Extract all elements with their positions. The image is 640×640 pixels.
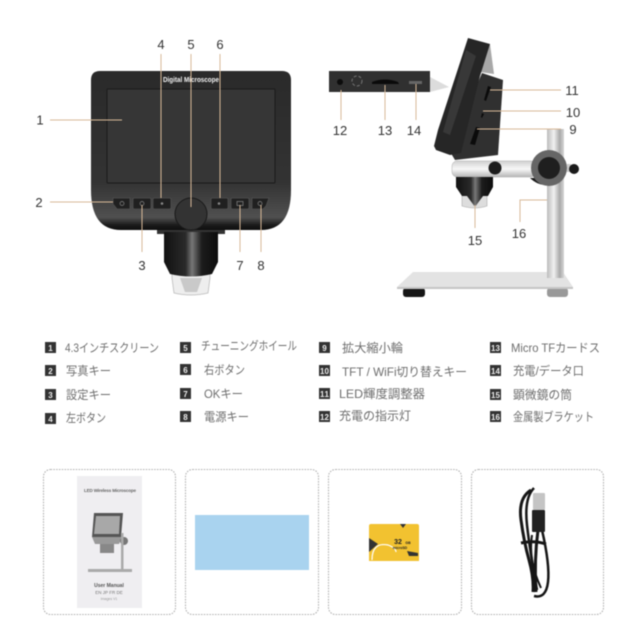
legend item 4 <box>45 410 106 425</box>
lens assembly <box>456 177 493 208</box>
yellow micro SD card <box>369 524 419 561</box>
legend item 11: 11 <box>320 390 330 399</box>
front view of microscope <box>91 71 291 295</box>
legend item 11: LED輝度調整器 <box>339 387 425 401</box>
legend item 3 <box>45 388 111 402</box>
legend item 16: 金属製ブラケット <box>513 409 594 424</box>
legend item 12: 充電の指示灯 <box>339 408 411 423</box>
side controls <box>470 86 491 145</box>
brand text: Digital Microscope <box>163 75 219 84</box>
side view callouts: 15 <box>468 233 482 248</box>
legend item 4: 左ボタン <box>66 410 106 425</box>
display shell <box>434 38 490 155</box>
side view of microscope <box>397 38 579 297</box>
monitor body <box>91 71 291 230</box>
yellow micro SD card: GB <box>405 541 411 545</box>
panel: user manual <box>44 470 176 614</box>
legend item 9: 9 <box>322 344 327 353</box>
yellow micro SD card: microSD <box>393 546 408 550</box>
clamp wheel <box>530 150 579 186</box>
manual booklet: LED Wireless Microscope <box>84 488 136 493</box>
legend item 7: OKキー <box>204 387 243 401</box>
legend item 16: 16 <box>491 413 501 422</box>
side view callouts: 14 <box>407 123 421 138</box>
side housing <box>449 73 503 160</box>
screen <box>107 89 275 183</box>
legend item 14: 14 <box>491 367 501 376</box>
front view callouts: 6 <box>216 37 224 52</box>
focus knob <box>488 162 502 174</box>
tuning wheel <box>175 198 207 230</box>
legend item 7: 7 <box>183 390 188 399</box>
legend item 9: 拡大縮小輪 <box>342 341 403 355</box>
legend item 2: 2 <box>48 367 53 376</box>
front view callouts: 8 <box>257 258 265 273</box>
legend item 8: 電源キー <box>204 410 249 424</box>
front view callouts <box>35 37 265 273</box>
legend item 7 <box>180 387 243 401</box>
legend item 14: 充電/データ口 <box>513 363 584 378</box>
grey rear of display <box>480 44 494 74</box>
manual booklet: EN JP FR DE <box>95 590 123 595</box>
stand base <box>397 272 573 297</box>
legend item 4: 4 <box>48 415 53 424</box>
legend item 12: 12 <box>320 413 330 422</box>
side view callouts: 13 <box>378 123 392 138</box>
legend item 10: TFT / WiFi切り替えキー <box>342 365 467 379</box>
legend item 13: Micro TFカードス <box>511 341 600 355</box>
side view callouts: 16 <box>512 226 526 241</box>
side view callouts: 9 <box>569 122 577 137</box>
legend item 5: 5 <box>183 344 188 353</box>
pole <box>547 129 564 278</box>
legend item 5 <box>180 339 297 353</box>
panel: USB cable <box>472 470 604 614</box>
panel: cleaning cloth <box>186 470 318 614</box>
front view callouts: 4 <box>157 37 165 52</box>
legend item 15: 顕微鏡の筒 <box>513 387 572 402</box>
legend item 8 <box>180 410 249 424</box>
legend item 8: 8 <box>183 413 188 422</box>
manual booklet: Images V1 <box>101 597 117 601</box>
lens barrel <box>157 229 225 295</box>
legend item 6: 6 <box>183 366 188 375</box>
panel: memory card <box>328 470 462 614</box>
front view callouts: 2 <box>35 195 43 210</box>
legend item 1: 1 <box>48 344 53 353</box>
legend item 15: 15 <box>491 391 501 400</box>
legend item 13: 13 <box>491 344 501 353</box>
legend item 2: 写真キー <box>66 364 111 378</box>
arm <box>452 161 536 177</box>
legend item 1: 4.3インチスクリーン <box>65 341 159 355</box>
legend item 14 <box>490 363 584 378</box>
legend item 16 <box>490 409 594 424</box>
manual booklet: User Manual <box>94 583 124 589</box>
front view callouts: 5 <box>187 37 195 52</box>
side view callouts: 11 <box>565 83 579 98</box>
side view callouts: 10 <box>566 105 580 120</box>
side view callouts: 12 <box>333 123 347 138</box>
side port inset <box>329 71 449 92</box>
coiled USB cable <box>520 488 548 596</box>
legend item 3: 設定キー <box>66 388 111 402</box>
legend item 5: チューニングホイール <box>201 339 297 353</box>
legend <box>45 339 600 425</box>
blue cloth <box>195 515 309 570</box>
legend item 6 <box>180 362 245 377</box>
front view callouts: 1 <box>36 112 44 128</box>
legend item 3: 3 <box>48 391 53 400</box>
buttons <box>113 198 269 209</box>
legend item 15 <box>490 387 572 402</box>
legend item 10: 10 <box>320 367 330 376</box>
front view callouts: 7 <box>236 258 244 273</box>
front view callouts: 3 <box>138 258 146 273</box>
side view callouts <box>333 83 580 248</box>
legend item 6: 右ボタン <box>204 362 245 377</box>
legend item 2 <box>45 364 111 378</box>
manual booklet <box>77 476 142 608</box>
yellow micro SD card: 32 <box>394 539 402 546</box>
